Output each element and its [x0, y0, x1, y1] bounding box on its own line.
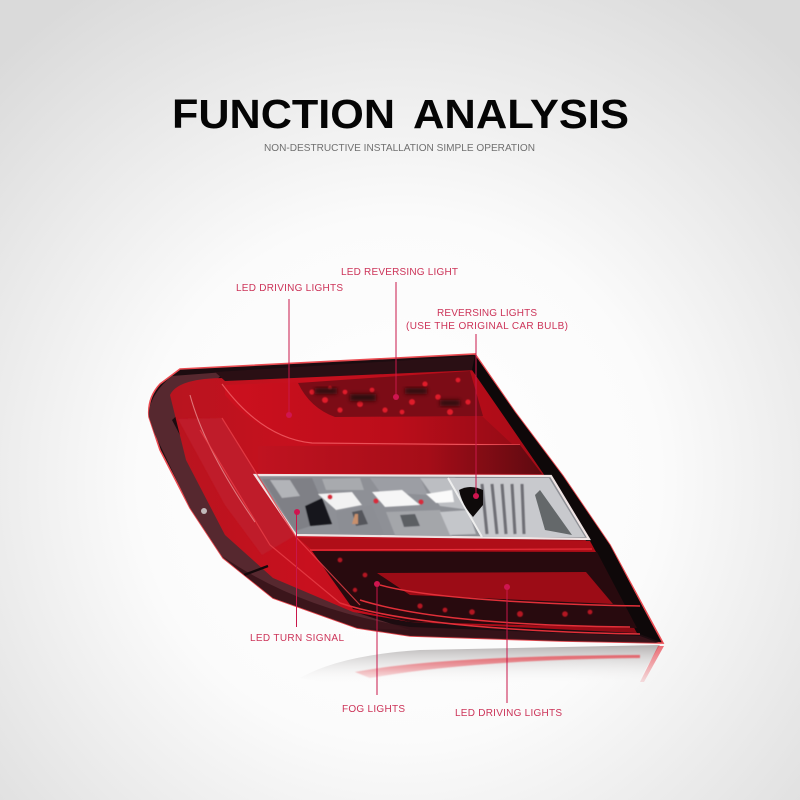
upper LED compartment — [298, 371, 483, 417]
subtitle: NON-DESTRUCTIVE INSTALLATION SIMPLE OPERATION — [264, 142, 535, 154]
upper red strip — [225, 382, 512, 444]
chrome facets — [262, 478, 476, 536]
reflector strip — [258, 445, 542, 474]
callout: LED driving lights lower — [455, 584, 562, 719]
bulb socket — [459, 487, 483, 517]
black clip mark — [244, 566, 268, 575]
callout: fog lights: FOG LIGHTS — [342, 704, 405, 715]
callout: reversing lights — [406, 308, 568, 499]
lower sweep lines — [340, 585, 640, 634]
lower red band — [298, 538, 596, 552]
left grey rim — [148, 372, 410, 630]
left sweep lines — [200, 418, 360, 605]
left reflector highlight — [190, 395, 255, 522]
callout: LED turn signal: LED TURN SIGNAL — [250, 633, 344, 644]
lamp housing — [149, 354, 663, 643]
lower dark section — [312, 551, 637, 628]
lower LED dots — [338, 558, 592, 617]
callout: LED driving lights upper: LED DRIVING LIGHTS — [236, 283, 343, 294]
callout: LED reversing light — [341, 267, 458, 400]
lower highlight line — [310, 549, 592, 550]
left side bracket — [201, 508, 207, 514]
title: ANALYSIS — [413, 91, 629, 137]
callout: reversing lights: REVERSING LIGHTS — [437, 308, 537, 319]
title — [172, 91, 629, 137]
top dark band — [215, 356, 478, 381]
tail light — [148, 354, 664, 645]
title: FUNCTION — [172, 91, 395, 137]
lower red strip — [377, 572, 613, 604]
main red lens — [170, 368, 637, 633]
callout: LED driving lights upper — [236, 283, 343, 418]
callout: LED reversing light: LED REVERSING LIGHT — [341, 267, 458, 278]
callout: LED driving lights lower: LED DRIVING LIGHTS — [455, 708, 562, 719]
reflection of the tail light — [300, 645, 664, 685]
lamp interior — [148, 355, 664, 645]
reverse light section — [448, 478, 585, 537]
upper LED dark patches — [315, 388, 460, 406]
callout: LED turn signal — [250, 509, 344, 644]
upper red sweep line — [222, 384, 520, 445]
clear band — [255, 475, 589, 539]
callout: fog lights — [342, 581, 405, 715]
right black edge — [472, 355, 661, 642]
upper LED dots — [309, 378, 471, 415]
callout: reversing lights: (USE THE ORIGINAL CAR BULB) — [406, 321, 568, 332]
bottom dark rim — [222, 556, 664, 645]
left reflector — [178, 418, 296, 555]
